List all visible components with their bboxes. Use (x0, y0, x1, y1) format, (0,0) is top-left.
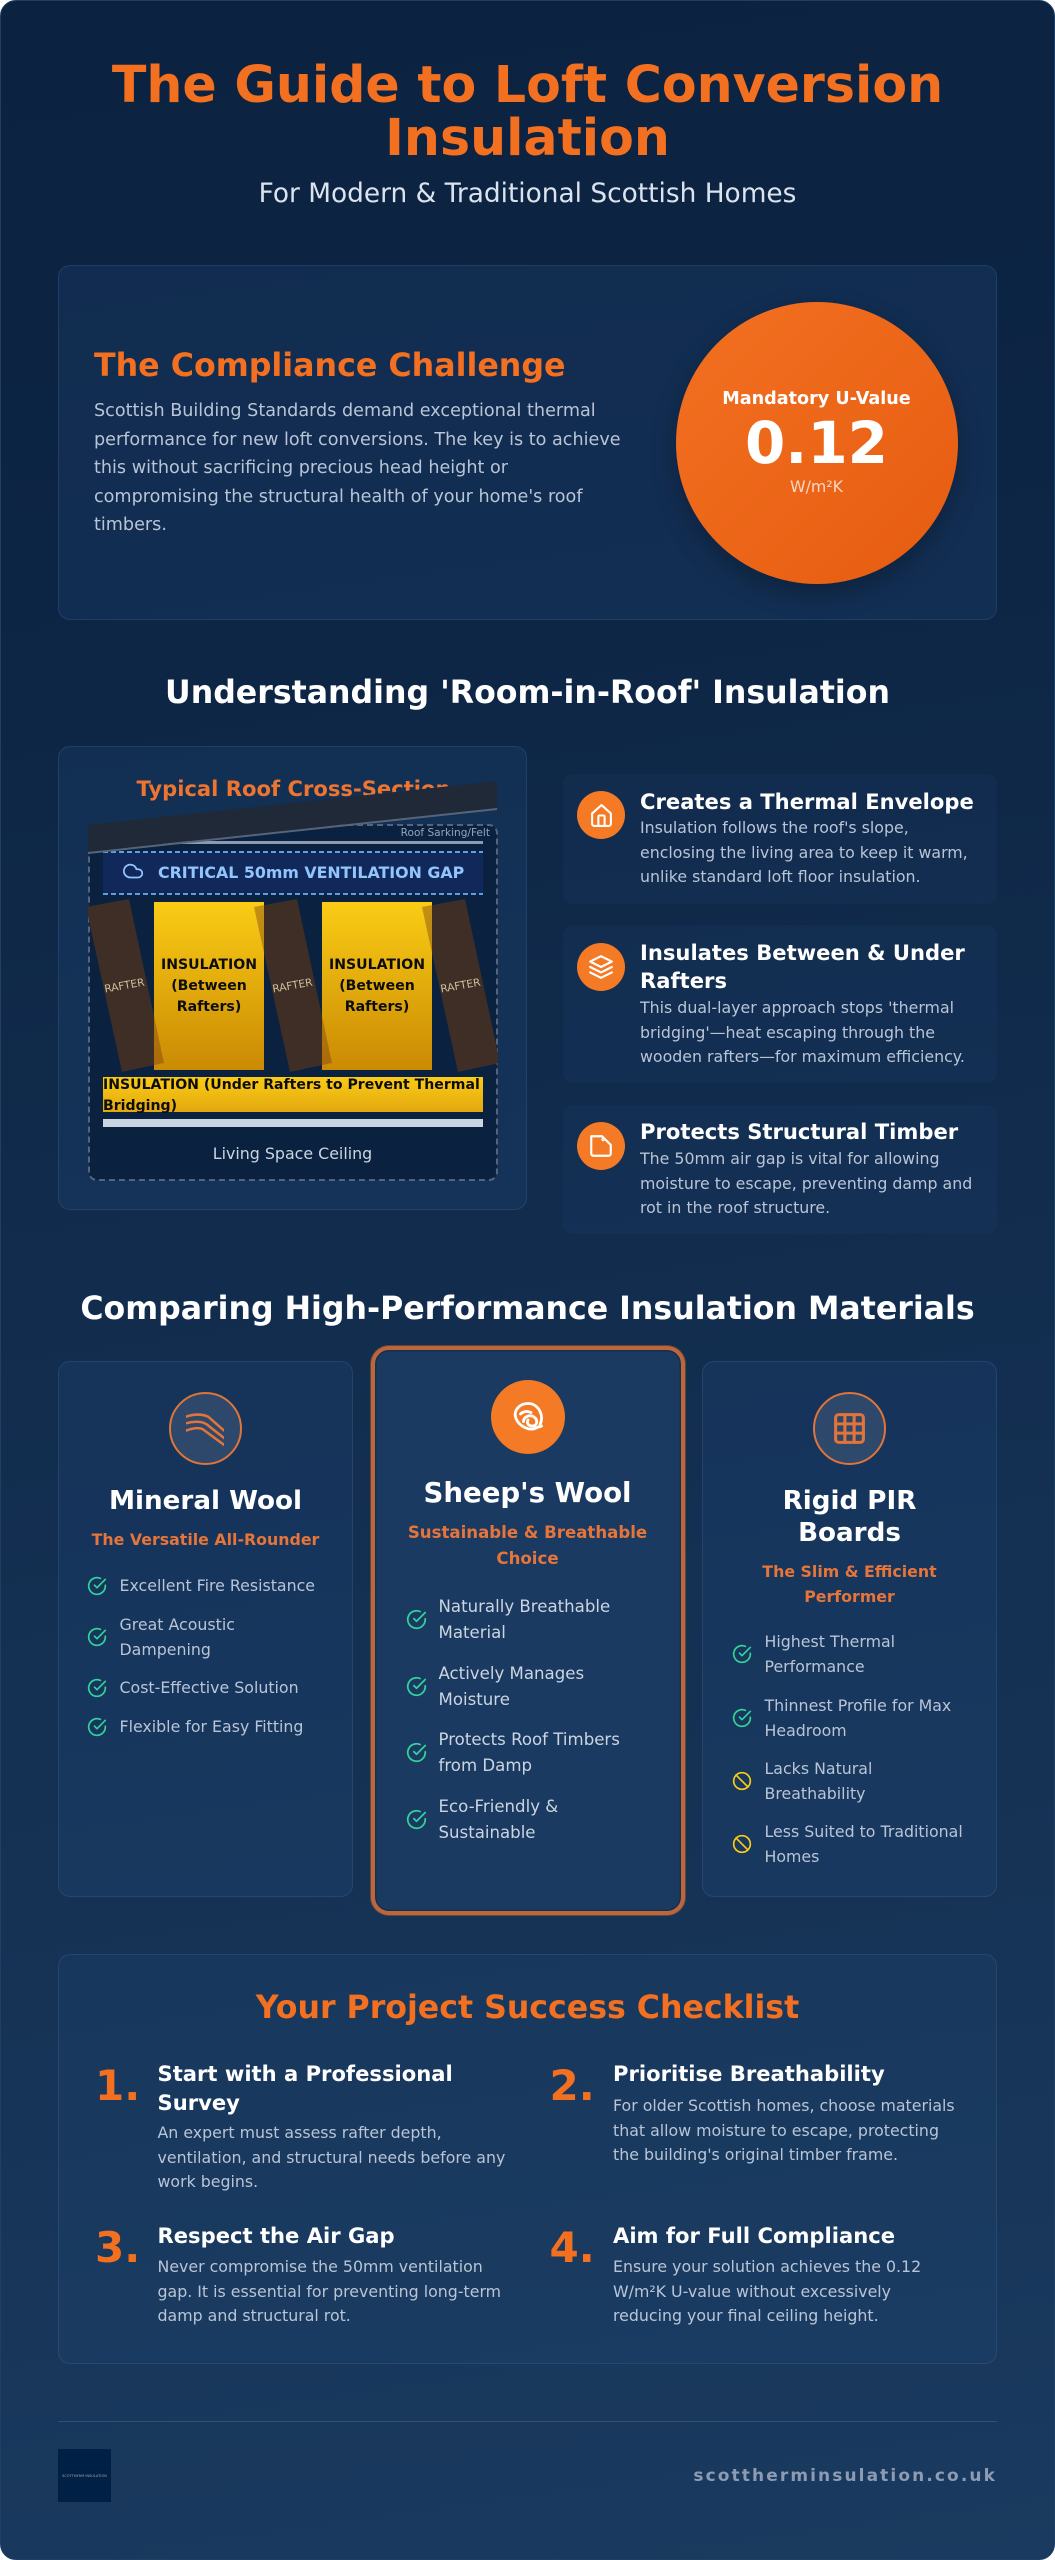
feature: eco-friendly (406, 1796, 558, 1842)
heading: room-in-roof: Understanding 'Room-in-Roof' Insulation (165, 675, 890, 711)
step text (158, 2123, 505, 2191)
insulation between rafters 2 (322, 902, 432, 1070)
feature: acoustic dampening: Great Acoustic (120, 1615, 235, 1634)
material tagline: Performer (804, 1587, 895, 1606)
feature: manages moisture (406, 1664, 584, 1709)
card text: enclosing the living area to keep it warm, (640, 843, 968, 862)
title (112, 55, 943, 167)
icon: mineral wool (168, 1392, 242, 1465)
step text: ventilation, and structural needs before any (158, 2148, 505, 2167)
panel: project success checklist (58, 1954, 997, 2364)
icon: sheep's wool (490, 1380, 564, 1454)
insulation under rafters (103, 1077, 483, 1114)
step 1 (95, 2061, 505, 2191)
feature: protects timbers: Protects Roof Timbers (438, 1730, 620, 1748)
icon: cloud (124, 865, 142, 877)
step text: that allow moisture to escape, protecting (613, 2121, 939, 2140)
card title: Protects Structural Timber (640, 1119, 958, 1144)
logo: SCOTTHERM INSULATION (62, 2474, 107, 2478)
insulation labels: INSULATION (329, 957, 425, 973)
icon: house (577, 791, 625, 839)
drawback: breathability (732, 1759, 872, 1803)
material name: Boards (798, 1518, 901, 1548)
insulation labels: INSULATION (161, 957, 257, 973)
step text (158, 2257, 501, 2325)
feature: thermal performance: Performance (764, 1657, 865, 1676)
rafter labels: RAFTER (104, 977, 146, 995)
feature: thinnest profile (732, 1696, 951, 1740)
step text: An expert must assess rafter depth, (158, 2123, 442, 2142)
label: ventilation gap: CRITICAL 50mm VENTILATION GAP (158, 863, 464, 882)
card title: Rafters (640, 968, 727, 993)
icon: timber board (577, 1122, 625, 1170)
insulation under rafters: Bridging) (103, 1098, 177, 1114)
card text: unlike standard loft floor insulation. (640, 867, 921, 886)
card: between and under rafters (563, 925, 997, 1083)
unit: W/m²K: W/m²K (790, 477, 843, 496)
ventilation gap (103, 852, 483, 894)
heading: compliance challenge: The Compliance Challenge (94, 348, 566, 384)
logo (58, 2449, 111, 2502)
material tagline: The Slim & Efficient (762, 1562, 937, 1581)
title: Insulation (385, 108, 670, 167)
card title: Insulates Between & Under (640, 940, 965, 965)
feature: manages moisture: Moisture (438, 1690, 510, 1709)
insulation labels: (Between (339, 978, 415, 994)
card: structural timber (563, 1105, 997, 1234)
text: compliance body (94, 401, 621, 535)
step text: gap. It is essential for preventing long-term (158, 2282, 501, 2301)
text: compliance body: compromising the structural health of your home's roof (94, 486, 583, 506)
feature: breathable: Material (438, 1623, 506, 1642)
card: thermal envelope (563, 774, 997, 904)
step 2 (550, 2061, 955, 2164)
card title: Creates a Thermal Envelope (640, 789, 974, 814)
sarking line (103, 841, 483, 844)
step title: Prioritise Breathability (613, 2061, 885, 2086)
card text: bridging'—heat escaping through the (640, 1023, 935, 1042)
text: compliance body: performance for new loft conversions. The key is to achieve (94, 430, 621, 450)
feature: thermal performance (732, 1632, 895, 1676)
feature: thermal performance: Highest Thermal (764, 1632, 895, 1651)
step text: W/m²K U-value without excessively (613, 2282, 891, 2301)
card title (640, 940, 965, 993)
website url: scottherminsulation.co.uk (693, 2466, 997, 2486)
insulation labels: (Between (171, 978, 247, 994)
feature: thinnest profile: Headroom (764, 1721, 847, 1740)
sarking label: Roof Sarking/Felt (401, 827, 490, 839)
card text: This dual-layer approach stops 'thermal (640, 998, 954, 1017)
feature: eco-friendly: Sustainable (438, 1823, 536, 1842)
title: typical roof cross-section: Typical Roof Cross-Section (136, 776, 451, 801)
label: living space ceiling: Living Space Ceiling (213, 1144, 372, 1163)
heading: checklist: Your Project Success Checklist (256, 1990, 799, 2026)
number 2: 2. (550, 2061, 595, 2110)
number: 0.12: 0.12 (745, 409, 888, 477)
icon: PIR grid (813, 1392, 886, 1465)
material tagline: Choice (496, 1548, 559, 1568)
feature: protects timbers: from Damp (438, 1756, 532, 1775)
callout: mandatory U-value circle (676, 302, 958, 584)
card text (640, 1149, 972, 1217)
step text: Never compromise the 50mm ventilation (158, 2257, 483, 2276)
feature: protects timbers (406, 1730, 620, 1775)
step text: damp and structural rot. (158, 2306, 351, 2325)
panel: mineral wool (58, 1361, 353, 1897)
insulation under rafters: INSULATION (Under Rafters to Prevent Thermal (103, 1077, 480, 1093)
step title: Survey (158, 2090, 240, 2115)
insulation labels: Rafters) (345, 999, 409, 1015)
card text: rot in the roof structure. (640, 1198, 830, 1217)
ceiling board (103, 1119, 483, 1127)
number 3: 3. (95, 2223, 140, 2272)
step text: reducing your final ceiling height. (613, 2306, 879, 2325)
step title (158, 2061, 453, 2115)
step title: Aim for Full Compliance (613, 2223, 895, 2248)
drawback: breathability: Lacks Natural (764, 1759, 872, 1778)
feature: breathable: Naturally Breathable (438, 1596, 610, 1616)
card text: wooden rafters—for maximum efficiency. (640, 1047, 965, 1066)
heading: comparing materials: Comparing High-Performance Insulation Materials (80, 1291, 975, 1327)
step text (613, 2096, 955, 2164)
insulation between rafters 1 (154, 902, 264, 1070)
diagram: roof cross-section (88, 780, 498, 1181)
card text: The 50mm air gap is vital for allowing (640, 1149, 940, 1168)
rafter labels: RAFTER (440, 977, 482, 995)
step title: Respect the Air Gap (158, 2223, 395, 2248)
card text: moisture to escape, preventing damp and (640, 1174, 972, 1193)
insulation labels (161, 957, 425, 1015)
step 4 (550, 2223, 921, 2325)
material name: Rigid PIR (783, 1486, 916, 1516)
step title: Start with a Professional (158, 2061, 453, 2086)
panel: roof cross-section (58, 746, 527, 1210)
feature: manages moisture: Actively Manages (438, 1664, 584, 1682)
panel: compliance challenge (58, 265, 997, 620)
number 1: 1. (95, 2061, 140, 2110)
text: compliance body: Scottish Building Standards demand exceptional thermal (94, 401, 596, 421)
drawback: breathability: Breathability (764, 1784, 866, 1803)
rafter labels (104, 977, 482, 995)
card text (640, 998, 965, 1066)
step text: For older Scottish homes, choose materials (613, 2096, 955, 2115)
feature: cost-effective: Cost-Effective Solution (120, 1678, 299, 1697)
drawback: traditional homes: Less Suited to Traditional (764, 1822, 963, 1841)
title: The Guide to Loft Conversion (112, 55, 943, 114)
step text: work begins. (158, 2172, 258, 2191)
material tagline (762, 1562, 937, 1606)
step text (613, 2257, 921, 2325)
panel: sheep's wool (highlighted) (370, 1346, 684, 1914)
step 3 (95, 2223, 501, 2325)
icon: layers (577, 943, 625, 991)
feature: fire resistance: Excellent Fire Resistance (120, 1576, 315, 1595)
step text: Ensure your solution achieves the 0.12 (613, 2257, 921, 2276)
text: compliance body: this without sacrificing precious head height or (94, 458, 508, 478)
drawback: traditional homes (732, 1822, 963, 1866)
material tagline (408, 1522, 647, 1568)
drawback: traditional homes: Homes (764, 1847, 819, 1866)
number 4: 4. (550, 2223, 595, 2272)
card text: Insulation follows the roof's slope, (640, 818, 909, 837)
card text (640, 818, 968, 886)
label: mandatory U-value: Mandatory U-Value (722, 389, 911, 409)
feature: flexible fitting: Flexible for Easy Fitting (120, 1717, 303, 1736)
material name (783, 1486, 916, 1548)
diagram box (89, 825, 497, 1180)
insulation labels: Rafters) (177, 999, 241, 1015)
text: compliance body: timbers. (94, 515, 167, 535)
feature: eco-friendly: Eco-Friendly & (438, 1796, 558, 1816)
subtitle: For Modern & Traditional Scottish Homes (259, 178, 796, 209)
material tagline: Sustainable & Breathable (408, 1522, 647, 1542)
step text: the building's original timber frame. (613, 2145, 898, 2164)
rafter overlap shading (154, 905, 432, 1065)
feature: thinnest profile: Thinnest Profile for Max (764, 1696, 951, 1715)
rafter labels: RAFTER (272, 977, 314, 995)
material tagline: The Versatile All-Rounder (92, 1530, 319, 1549)
material name: Sheep's Wool (423, 1476, 632, 1508)
material name: Mineral Wool (109, 1486, 302, 1516)
rafters (86, 899, 500, 1072)
feature: acoustic dampening (88, 1615, 235, 1659)
feature: breathable (406, 1596, 610, 1642)
roof slab (88, 781, 497, 853)
panel: rigid PIR boards (702, 1361, 997, 1897)
feature: acoustic dampening: Dampening (120, 1640, 211, 1659)
